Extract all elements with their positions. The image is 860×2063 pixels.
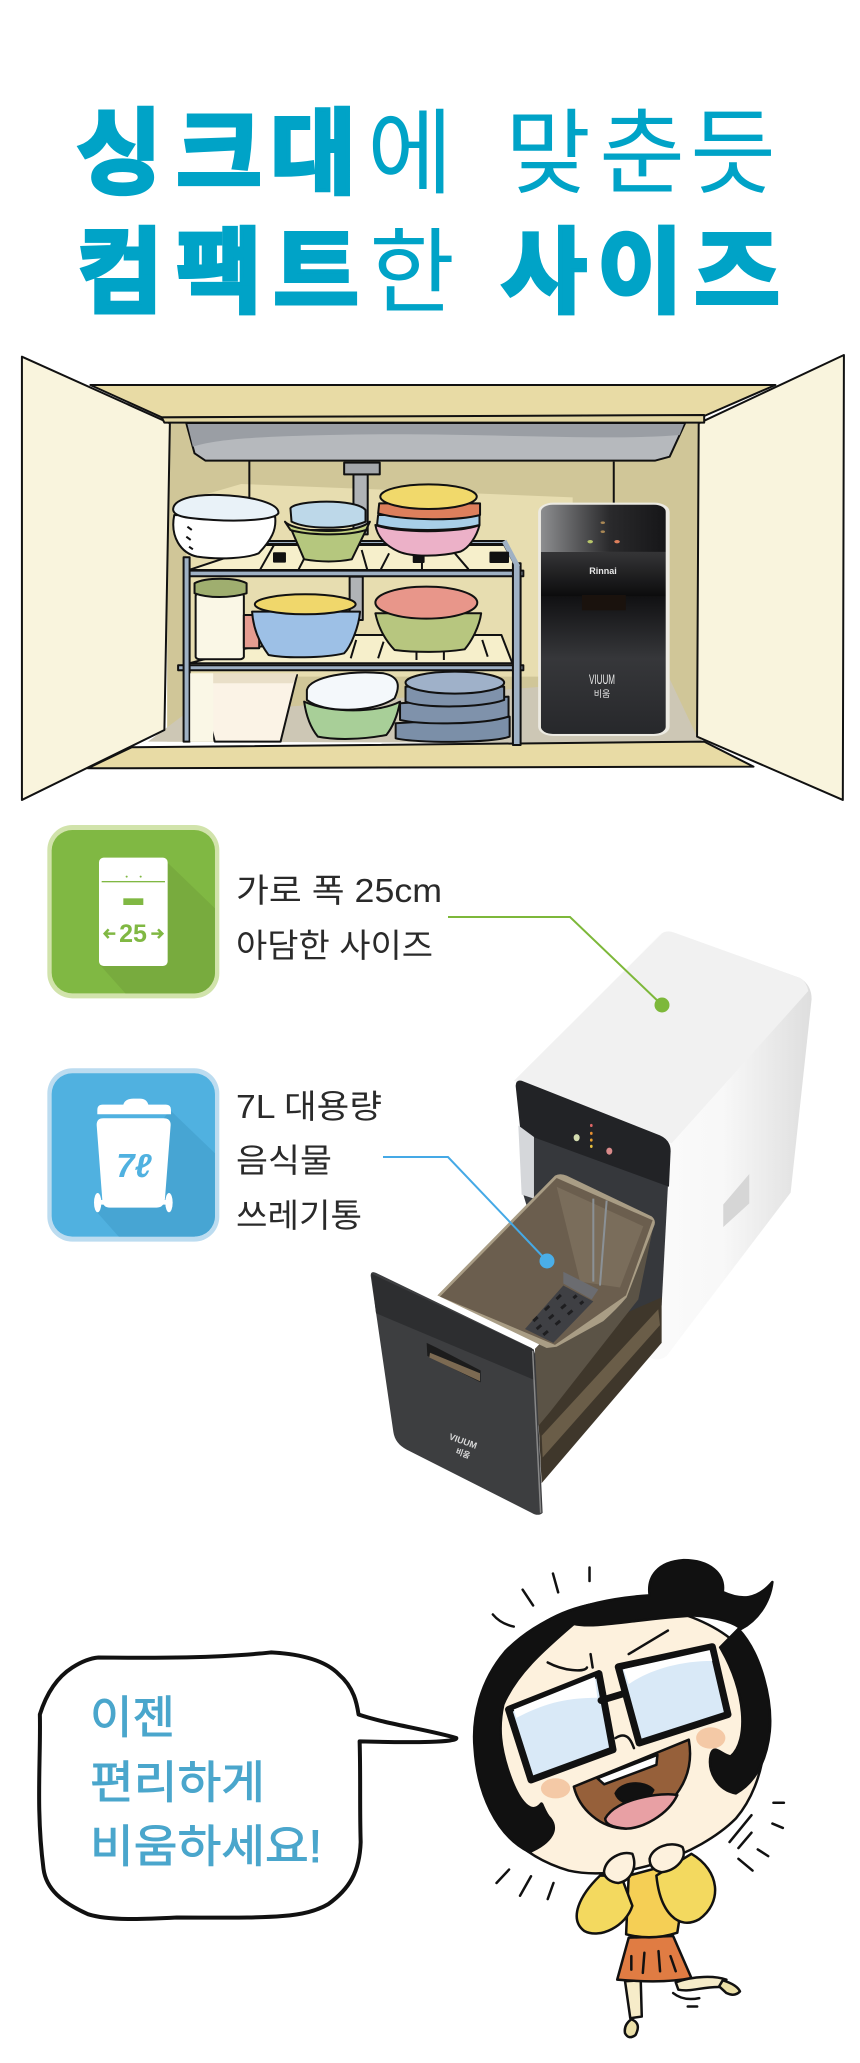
glasses (509, 1647, 728, 1780)
inner opening (520, 1125, 668, 1347)
title (76, 102, 780, 325)
green pot with blue lid (285, 502, 370, 561)
product: open food waste unit (371, 931, 812, 1515)
pink and green bowls (375, 587, 481, 652)
feature icon: 7 litre bin (47, 1068, 219, 1242)
bin lower body (535, 1226, 653, 1428)
device brand labels: 비움 (594, 689, 610, 699)
tall jar (195, 579, 259, 659)
hands (604, 1844, 684, 1883)
drawer brand labels: VIUUM (448, 1432, 478, 1451)
feature text: capacity: 음식물 (236, 1142, 332, 1179)
speech bubble (39, 1652, 456, 1919)
shelf rack (178, 541, 523, 745)
title: 한 (369, 221, 455, 325)
feature icon: width 25 (47, 825, 219, 998)
feature text: capacity (236, 1088, 382, 1234)
icon label 7 litre: 7ℓ (116, 1147, 153, 1184)
icon number 25: 25 (119, 920, 147, 948)
speech text: 비움하세요! (90, 1821, 322, 1872)
side badge (723, 1174, 749, 1227)
white body (513, 931, 812, 1359)
face (477, 1603, 765, 1873)
control panel (516, 1080, 671, 1187)
legs and feet (625, 1977, 740, 2037)
leader line: width to top of product (448, 917, 670, 1012)
drawer front (371, 1272, 543, 1515)
hair (474, 1560, 772, 1852)
stacked bowls (375, 484, 480, 556)
speech text: 이젠 (90, 1692, 175, 1743)
right door (697, 355, 844, 800)
mouth (574, 1740, 690, 1829)
device: food waste unit (538, 503, 670, 736)
feature text: capacity: 쓰레기통 (236, 1197, 362, 1234)
drain pipe (344, 463, 380, 620)
top frame (90, 385, 775, 417)
feature text: capacity: 7L 대용량 (236, 1088, 382, 1125)
character: excited woman with glasses (474, 1560, 784, 2037)
title: 컴팩트 (77, 221, 359, 325)
feature text: width: 가로 폭 25cm (236, 872, 442, 909)
skirt (617, 1936, 691, 1981)
perforated scoop (525, 1272, 598, 1343)
bottom frame (88, 742, 754, 768)
cheeks (541, 1727, 725, 1798)
feature text: width (236, 872, 442, 964)
speech text (90, 1692, 322, 1872)
top lip (162, 415, 704, 423)
leader line: capacity to bin (383, 1157, 554, 1268)
device brand labels: Rinnai (589, 566, 617, 576)
feature text: width: 아담한 사이즈 (236, 927, 433, 964)
waste bin (437, 1174, 655, 1348)
title: 사이즈 (501, 221, 780, 325)
blue-grey stacked tubs (396, 672, 510, 742)
device brand labels: VIUUM (589, 671, 615, 687)
cabinet interior back wall (148, 422, 704, 743)
drawer brand labels: 비움 (454, 1446, 472, 1461)
left door (22, 357, 170, 800)
top face shading (514, 932, 808, 1143)
illustration: under-sink cabinet (22, 355, 844, 800)
cream pail (190, 673, 297, 742)
surprise marks (493, 1568, 784, 1899)
green bowl with white lid (304, 672, 400, 739)
title: 에맞춘듯 (367, 102, 776, 206)
blue bowl with yellow lid (252, 594, 360, 657)
yellow sweater (577, 1854, 715, 1937)
drawer brand labels (448, 1432, 478, 1461)
white container (173, 495, 278, 558)
drawer rails (535, 1297, 662, 1483)
device brand labels (589, 566, 617, 699)
eyebrows and nose (548, 1631, 668, 1748)
speech text: 편리하게 (90, 1757, 265, 1808)
sink basin (186, 423, 685, 461)
title: 싱크대 (76, 102, 356, 206)
